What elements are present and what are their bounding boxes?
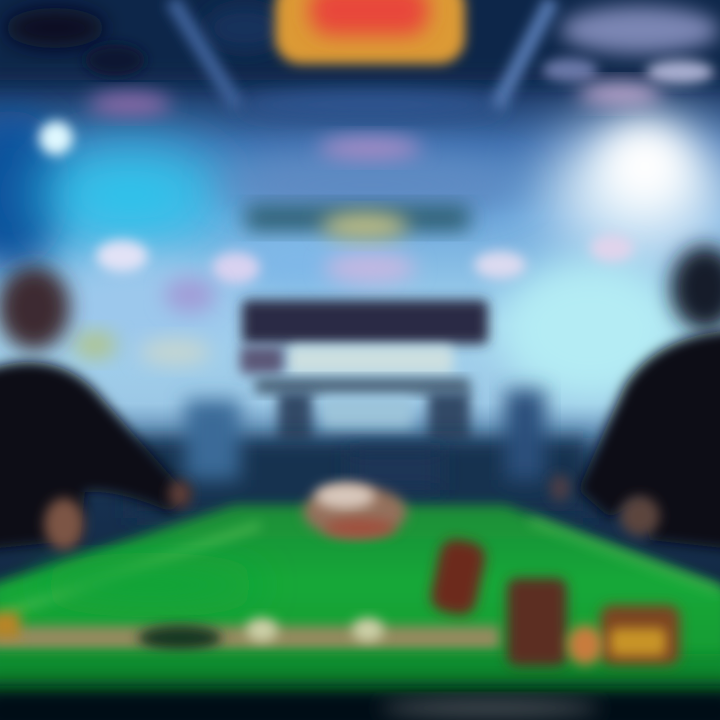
- left silhouette figure: [0, 266, 192, 550]
- stadium lights: [39, 121, 687, 366]
- right silhouette figure: [549, 246, 720, 550]
- football on field: [303, 483, 407, 538]
- stadium roof: [0, 0, 720, 160]
- green field: [0, 505, 720, 700]
- scoreboard: top glowing sign: [275, 0, 465, 64]
- upper sign text block: [245, 205, 470, 240]
- bottom dark strip: [0, 686, 720, 720]
- far stands skyline: [130, 390, 590, 518]
- brown game pieces: [428, 536, 680, 666]
- field sideline band: [0, 612, 720, 684]
- central headline block: [240, 300, 488, 442]
